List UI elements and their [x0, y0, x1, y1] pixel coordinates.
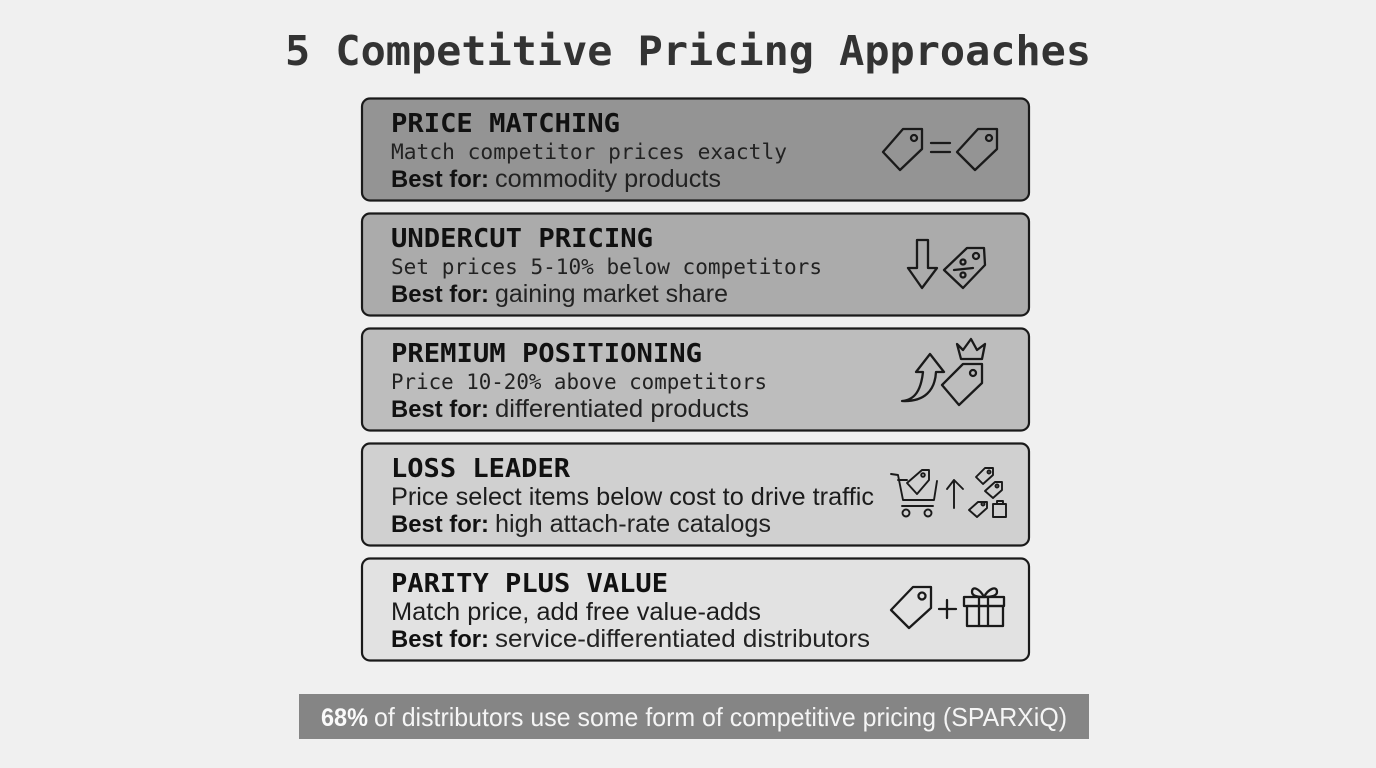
- best for: premium positioning: differentiated products: [495, 395, 749, 423]
- panel: undercut pricing: [362, 214, 1029, 316]
- best for: price matching: Best for:: [391, 166, 489, 193]
- heading: loss leader: LOSS LEADER: [391, 454, 570, 484]
- best for: undercut pricing: [391, 280, 728, 308]
- best for: loss leader: high attach-rate catalogs: [495, 510, 771, 538]
- best for: undercut pricing: gaining market share: [495, 280, 728, 308]
- icon: tag plus gift: [891, 587, 1004, 628]
- description: price matching: Match competitor prices exactly: [391, 140, 787, 164]
- panel: parity plus value: [362, 558, 1029, 660]
- best for: premium positioning: [391, 395, 749, 423]
- best for: parity plus value: service-differentiated distributors: [495, 625, 870, 653]
- statistic text: of distributors use some form of competitive pricing (SPARXiQ): [374, 702, 1067, 732]
- panel: price matching: [362, 98, 1029, 200]
- best for: price matching: commodity products: [495, 165, 721, 193]
- icon: rising arrow and crowned tag: [902, 339, 985, 405]
- description: premium positioning: Price 10-20% above competitors: [391, 370, 767, 394]
- description: loss leader: Price select items below cost to drive traffic: [391, 483, 874, 511]
- icon: down arrow and discount tag: [908, 240, 985, 288]
- description: parity plus value: Match price, add free value-adds: [391, 598, 761, 626]
- callout: statistic banner: [299, 694, 1089, 739]
- title: 5 Competitive Pricing Approaches: [285, 27, 1091, 75]
- heading: parity plus value: PARITY PLUS VALUE: [391, 569, 668, 599]
- best for: loss leader: Best for:: [391, 511, 489, 538]
- description: undercut pricing: Set prices 5-10% below competitors: [391, 255, 822, 279]
- heading: undercut pricing: UNDERCUT PRICING: [391, 224, 653, 254]
- best for: price matching: [391, 165, 721, 193]
- icon: cart, arrow and small tags: [891, 468, 1006, 517]
- statistic text: 68%: [321, 704, 368, 732]
- best for: undercut pricing: Best for:: [391, 281, 489, 308]
- best for: parity plus value: Best for:: [391, 626, 489, 653]
- best for: premium positioning: Best for:: [391, 396, 489, 423]
- panel: premium positioning: [362, 328, 1029, 430]
- icon: tag equals tag: [883, 129, 997, 170]
- panel: loss leader: [362, 444, 1029, 546]
- heading: premium positioning: PREMIUM POSITIONING: [391, 339, 702, 369]
- heading: price matching: PRICE MATCHING: [391, 109, 620, 139]
